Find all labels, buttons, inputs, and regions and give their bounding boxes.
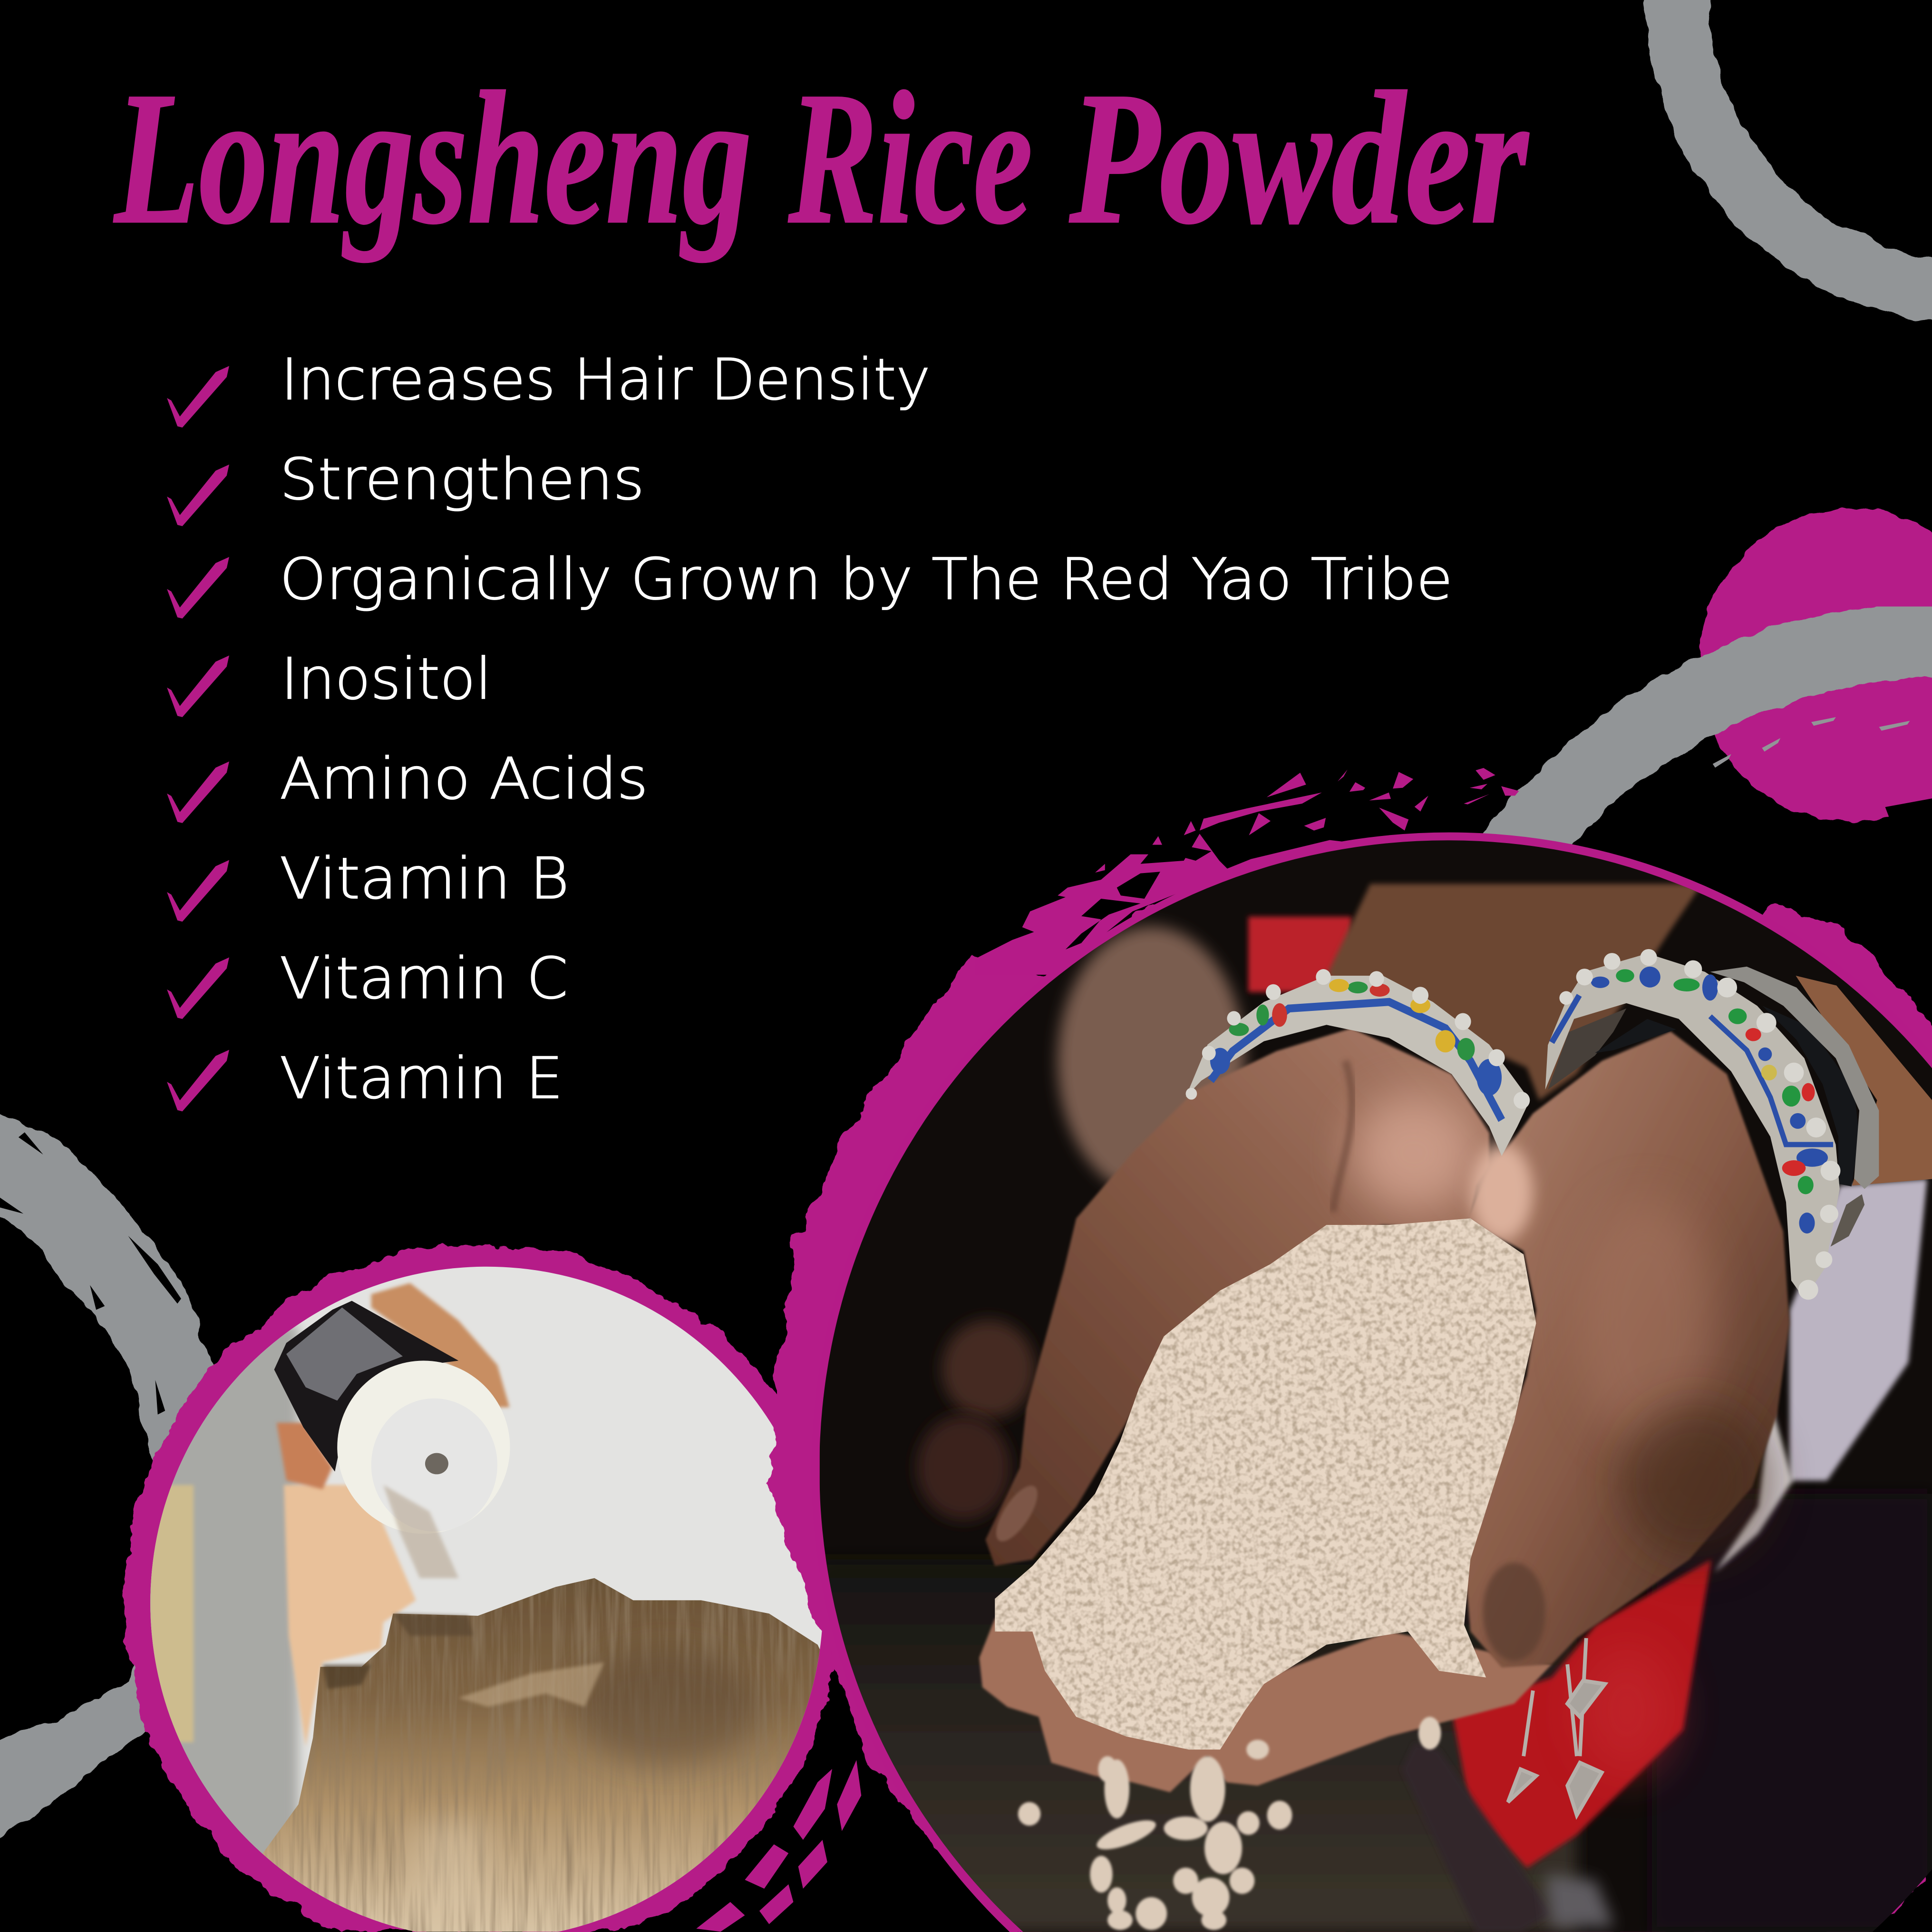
check icon 5	[167, 761, 229, 823]
check icon 2	[167, 465, 229, 526]
check icon 7	[167, 957, 229, 1019]
left hand	[986, 1028, 1489, 1566]
rice pile	[995, 1218, 1536, 1749]
photo: rice in hands	[820, 840, 1932, 1932]
title word: Longsheng: Longsheng	[112, 53, 752, 263]
pendants	[1508, 1638, 1605, 1815]
small photo brush ring	[125, 1244, 842, 1932]
title	[112, 53, 1530, 263]
item: Vitamin C: Vitamin C	[280, 946, 568, 1012]
fingers	[979, 1619, 1552, 1792]
photo: powder shaken on hair	[150, 1267, 822, 1932]
checklist	[167, 347, 1453, 1112]
blurred background	[820, 884, 1932, 1932]
panel: small photo circle	[119, 1236, 895, 1932]
smooth thin ring edge	[817, 838, 1932, 1932]
check icon 1	[167, 366, 229, 427]
decorative grey ring: right middle	[1509, 640, 1932, 863]
decorative grey ring: bottom left	[0, 1111, 219, 1846]
hand holding bottle	[277, 1283, 509, 1489]
check icon 8	[167, 1050, 229, 1111]
title word: Rice: Rice	[786, 53, 1032, 263]
decorative grey ring: top right	[1677, 0, 1932, 292]
right hand	[1464, 1031, 1789, 1668]
large photo brush ring	[769, 835, 1932, 1932]
item: Strengthens: Strengthens	[280, 447, 644, 513]
check icon 4	[167, 656, 229, 717]
item: Organically Grown by The Red Yao Tribe: Organically Grown by The Red Yao Tribe	[280, 546, 1453, 612]
brush splatter top	[975, 768, 1519, 975]
title word: Powder: Powder	[1067, 53, 1530, 263]
right arm	[1796, 976, 1932, 1185]
panel: large photo circle	[769, 768, 1932, 1932]
right bangles	[1545, 949, 1879, 1300]
check icon 6	[167, 860, 229, 922]
item: Increases Hair Density: Increases Hair Density	[281, 347, 930, 413]
arm	[284, 1485, 416, 1747]
black cord	[1762, 1006, 1859, 1186]
bottom right splatter	[1879, 1875, 1932, 1932]
item: Vitamin E: Vitamin E	[280, 1046, 563, 1112]
bangle inside	[1548, 1009, 1626, 1089]
splatter outside small ring	[687, 1747, 880, 1932]
falling grains	[1018, 1717, 1441, 1930]
bottle	[274, 1301, 510, 1578]
decorative magenta circle: right	[1698, 509, 1932, 823]
hair	[235, 1578, 837, 1932]
check icon 3	[167, 557, 229, 619]
item: Vitamin B: Vitamin B	[280, 846, 569, 912]
plain silver bangle	[1710, 967, 1879, 1189]
item: Inositol: Inositol	[281, 646, 492, 712]
left bangle	[1186, 969, 1530, 1156]
item: Amino Acids: Amino Acids	[280, 746, 648, 812]
enamel bangle band	[1545, 953, 1840, 1299]
